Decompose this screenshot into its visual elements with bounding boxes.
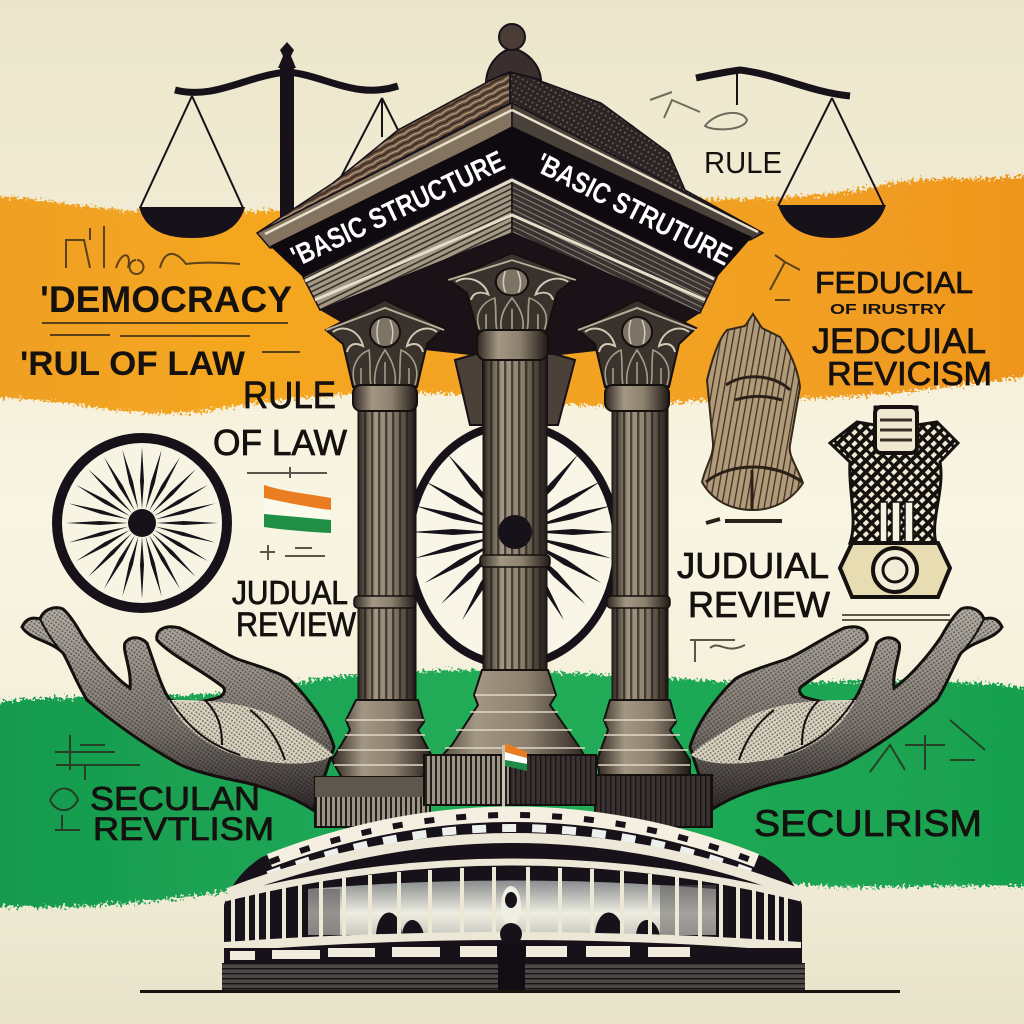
icon: right scales [650,70,886,238]
text: judicial review right [677,545,830,625]
text: fedual judicial right: REVICISM [827,355,992,392]
text: fedual judicial right [812,265,992,392]
text: judicial review left: JUDUAL [232,574,348,611]
orange scribble [770,255,800,300]
text: judicial review right: REVIEW [688,584,830,625]
pillar centre [424,253,596,805]
roof label right: 'BASIC STRUTURE [531,148,736,272]
icon: left scales [139,42,398,238]
pillar left [315,300,444,827]
roof label left: 'BASIC STRUCTURE [286,145,510,273]
text: judicial review left [232,574,356,644]
icon: lion capital emblem [830,407,958,597]
text: secularism revivalism left: REVTLISM [93,811,274,847]
hand right [690,608,1002,810]
scribble green left [50,735,140,830]
pillar right [578,300,712,827]
flag on base [502,743,527,807]
text: secularism right: SECULRISM [754,803,982,844]
roof [257,24,763,277]
back capitals [455,352,575,425]
text: secularism revivalism left [90,780,274,847]
text: rule of law centre: RULE [243,375,336,417]
heading: democracy: 'DEMOCRACY [40,279,292,320]
text: rule of law centre [213,375,347,463]
saffron band [0,172,1024,414]
text: judicial review right: JUDUIAL [677,545,829,586]
scribble above judual [260,545,325,560]
text: rule top right: RULE [704,145,782,180]
text: secularism revivalism left: SECULAN [90,780,260,817]
icon: ashoka wheel left [57,438,227,608]
text: rule of law centre: OF LAW [213,422,347,463]
hand left [22,608,334,810]
icon: central ashoka wheel [409,425,617,665]
text: judicial review left: REVIEW [236,606,356,644]
text: rule of law left: 'RUL OF LAW [20,345,246,383]
entablature [303,177,717,355]
icon: small flag [264,485,331,533]
scribble green right [870,720,985,772]
rule scribble [247,467,327,478]
scribble above democracy [66,226,240,274]
figure statue [702,314,803,510]
text: fedual judicial right: JEDCUIAL [812,322,986,361]
green band [0,670,1024,907]
scribble below review [690,615,950,662]
text: fedual judicial right: FEDUCIAL [815,265,973,300]
text: fedual judicial right: OF IRUSTRY [830,301,946,318]
underline scribble [42,323,300,352]
statue caption [706,519,782,523]
parliament building [140,807,900,993]
